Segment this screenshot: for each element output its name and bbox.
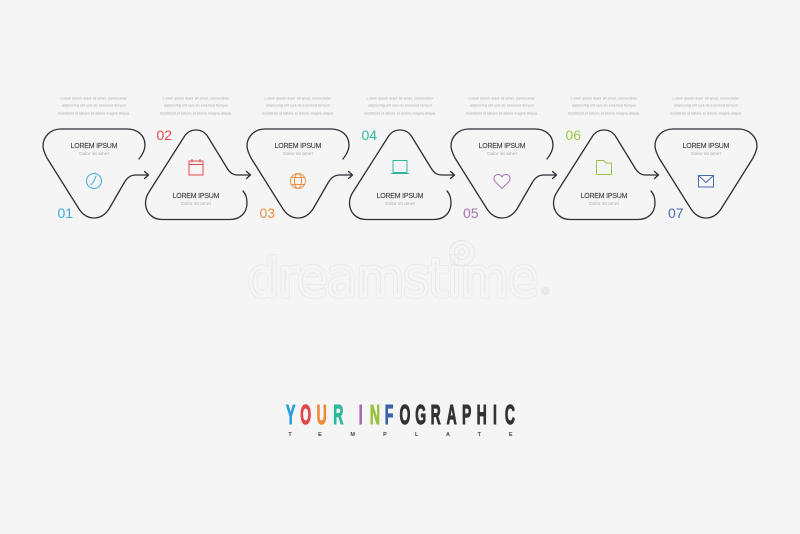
step 4 (350, 96, 454, 220)
step 6 (554, 96, 658, 220)
description 4: incididunt ut labore et dolore magna aliqua. (364, 112, 436, 116)
heading 4: LOREM IPSUM (376, 193, 424, 200)
description 4: adipiscing elit sed do eiusmod tempor (368, 104, 433, 108)
title: A (447, 399, 457, 430)
step 7 (655, 96, 757, 221)
title: U (317, 399, 327, 430)
icon: laptop (392, 160, 408, 174)
heading 1 (70, 143, 118, 157)
title: R (431, 399, 441, 430)
description 7: Lorem ipsum dolor sit amet, consectetur (672, 96, 740, 100)
description 3: incididunt ut labore et dolore magna aliqua. (262, 112, 334, 116)
heading 3 (274, 143, 322, 157)
heading 4: Dolor sit amet (385, 201, 415, 207)
outline with arrow 3 (247, 129, 352, 218)
heading 6: Dolor sit amet (589, 201, 619, 207)
description 2: incididunt ut labore et dolore magna aliqua. (160, 112, 232, 116)
heading 7 (682, 143, 730, 157)
outline with arrow 4 (350, 130, 454, 220)
description 1: incididunt ut labore et dolore magna aliqua. (58, 112, 130, 116)
outline with arrow 5 (451, 129, 556, 218)
subtitle: M (350, 432, 355, 438)
heading 1: Dolor sit amet (79, 151, 109, 157)
title: G (415, 399, 426, 430)
title: F (385, 399, 393, 430)
description 3: Lorem ipsum dolor sit amet, consectetur (264, 96, 332, 100)
subtitle: A (446, 432, 450, 438)
number 06: 06 (566, 127, 581, 143)
heading 5: Dolor sit amet (487, 151, 517, 157)
title: H (477, 399, 487, 430)
subtitle: P (383, 432, 387, 438)
description 4 (364, 96, 436, 116)
watermark: dreamstime (248, 249, 538, 309)
step 5 (451, 96, 556, 221)
description 7: adipiscing elit sed do eiusmod tempor (674, 104, 739, 108)
description 2 (160, 96, 232, 116)
heading 3: LOREM IPSUM (274, 143, 322, 150)
description 7 (670, 96, 742, 116)
title (286, 399, 515, 430)
number 03: 03 (260, 205, 275, 221)
step 3 (247, 96, 352, 221)
subtitle: E (318, 432, 322, 438)
heading 5: LOREM IPSUM (478, 143, 526, 150)
description 5: incididunt ut labore et dolore magna aliqua. (466, 112, 538, 116)
description 6: incididunt ut labore et dolore magna aliqua. (568, 112, 640, 116)
title: P (462, 399, 471, 430)
number 05: 05 (463, 205, 479, 221)
description 5 (466, 96, 538, 116)
outline with arrow 2 (146, 130, 250, 220)
subtitle: T (288, 432, 292, 438)
number 01: 01 (58, 205, 73, 221)
step 2 (146, 96, 250, 220)
title: Y (286, 399, 296, 430)
heading 5 (478, 143, 526, 157)
heading 7: LOREM IPSUM (682, 143, 730, 150)
icon: calendar (189, 160, 203, 175)
icon: envelope (698, 176, 714, 187)
description 7: incididunt ut labore et dolore magna aliqua. (670, 112, 742, 116)
heading 6: LOREM IPSUM (580, 193, 628, 200)
subtitle: T (478, 432, 482, 438)
icon: globe (290, 174, 306, 188)
description 1: adipiscing elit sed do eiusmod tempor (62, 104, 127, 108)
heading 2: Dolor sit amet (181, 201, 211, 207)
description 5: Lorem ipsum dolor sit amet, consectetur (468, 96, 536, 100)
watermark: dreamstime (248, 249, 538, 309)
title: C (505, 399, 515, 430)
heading 6 (580, 193, 628, 207)
description 6: adipiscing elit sed do eiusmod tempor (572, 104, 637, 108)
heading 2 (172, 193, 220, 207)
title: I (359, 399, 363, 430)
description 6 (568, 96, 640, 116)
subtitle: L (415, 432, 419, 438)
title: O (400, 399, 410, 430)
description 3: adipiscing elit sed do eiusmod tempor (266, 104, 331, 108)
icon: heart (494, 174, 510, 188)
number 04: 04 (362, 127, 377, 143)
icon: folder (596, 160, 612, 174)
outline 7 (655, 129, 757, 218)
heading 1: LOREM IPSUM (70, 143, 118, 150)
heading 3: Dolor sit amet (283, 151, 313, 157)
description 2: adipiscing elit sed do eiusmod tempor (164, 104, 229, 108)
description 4: Lorem ipsum dolor sit amet, consectetur (366, 96, 434, 100)
step 1 (43, 96, 148, 221)
heading 4 (376, 193, 424, 207)
icon: clock (86, 174, 102, 188)
description 5: adipiscing elit sed do eiusmod tempor (470, 104, 535, 108)
number 02: 02 (156, 127, 172, 143)
heading 7: Dolor sit amet (691, 151, 721, 157)
title: I (493, 399, 497, 430)
title: O (300, 399, 311, 430)
title: R (333, 399, 343, 430)
description 6: Lorem ipsum dolor sit amet, consectetur (570, 96, 638, 100)
description 2: Lorem ipsum dolor sit amet, consectetur (162, 96, 230, 100)
subtitle: E (509, 432, 513, 438)
outline with arrow 1 (43, 129, 148, 218)
description 3 (262, 96, 334, 116)
title: N (370, 399, 380, 430)
number 07: 07 (668, 205, 684, 221)
heading 2: LOREM IPSUM (172, 193, 220, 200)
outline with arrow 6 (554, 130, 658, 220)
description 1 (58, 96, 130, 116)
description 1: Lorem ipsum dolor sit amet, consectetur (60, 96, 128, 100)
